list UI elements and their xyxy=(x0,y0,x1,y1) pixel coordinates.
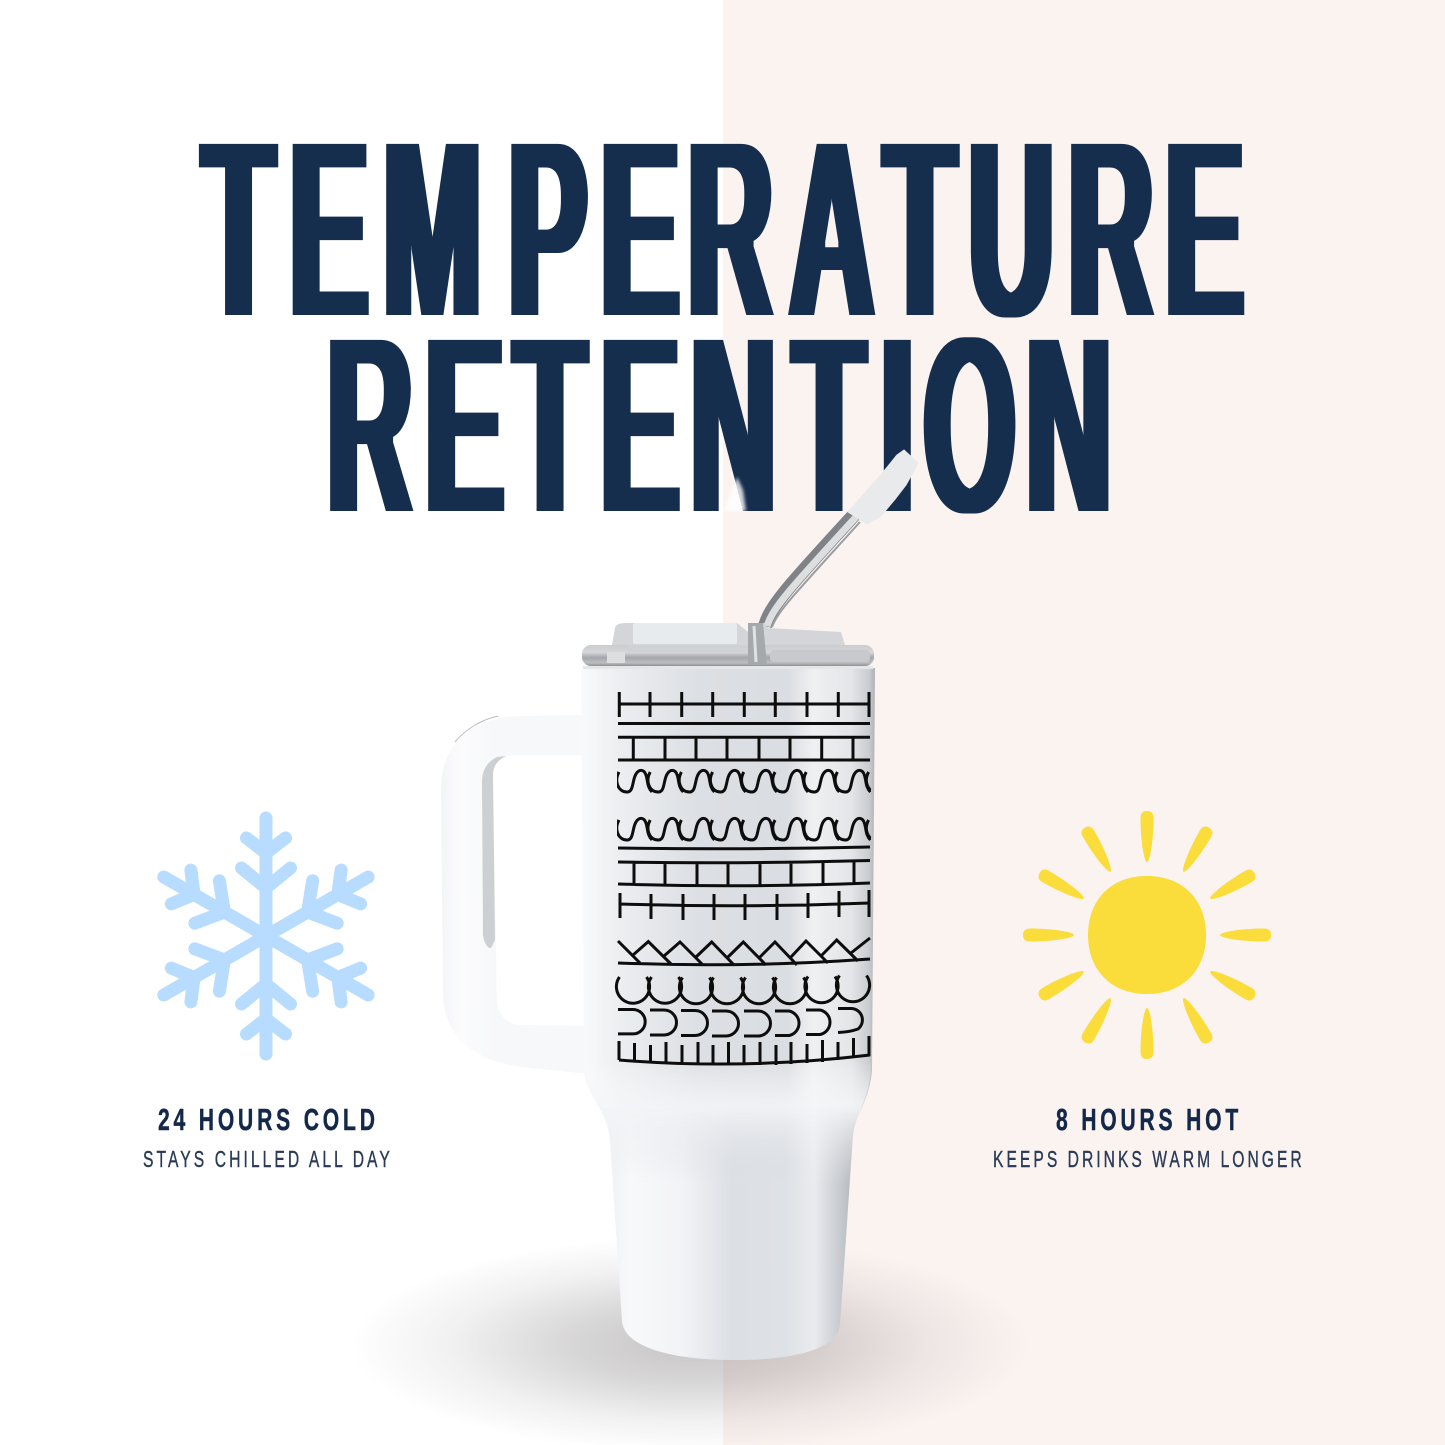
pattern: D shapes xyxy=(618,1008,862,1036)
cold subtext: STAYS CHILLED ALL DAY xyxy=(143,1147,390,1173)
tumbler lower section xyxy=(620,1115,858,1360)
snowflake icon xyxy=(152,818,380,1054)
pattern: tick row top xyxy=(619,692,870,717)
pattern: wave second xyxy=(617,816,871,842)
background: white left half xyxy=(0,0,723,1445)
handle xyxy=(441,715,590,1074)
tumbler pattern xyxy=(616,692,902,1065)
hot label xyxy=(993,1102,1302,1173)
straw xyxy=(765,514,860,627)
hot subtext: KEEPS DRINKS WARM LONGER xyxy=(993,1147,1302,1173)
title line 2: RETENTION xyxy=(327,284,1111,569)
pattern: rule second xyxy=(618,847,870,849)
pattern: comb xyxy=(619,1036,870,1065)
tumbler shoulder highlight xyxy=(584,1060,872,1170)
hot heading: 8 HOURS HOT xyxy=(1056,1102,1238,1137)
title retouch patch on N xyxy=(724,477,746,511)
lid xyxy=(582,623,874,669)
background: blush right half xyxy=(723,0,1445,1445)
title line 1: TEMPERATURE xyxy=(203,88,1244,373)
tumbler xyxy=(441,450,918,1360)
sun disc xyxy=(1088,876,1206,994)
pattern: tick row second xyxy=(619,890,870,920)
sun icon xyxy=(1023,811,1271,1059)
pattern: ladder second xyxy=(618,860,870,886)
pattern: rule xyxy=(618,722,870,725)
cold heading: 24 HOURS COLD xyxy=(158,1102,375,1137)
pattern: arcs xyxy=(616,976,870,1004)
straw silicone tip xyxy=(848,450,918,524)
pattern: ladder top xyxy=(618,737,870,760)
pattern: wave top xyxy=(617,768,871,794)
tumbler body xyxy=(581,668,875,1360)
cold label xyxy=(143,1102,390,1173)
title xyxy=(203,88,1244,569)
floor shadow xyxy=(350,1237,1030,1445)
pattern: triangles xyxy=(618,938,870,965)
